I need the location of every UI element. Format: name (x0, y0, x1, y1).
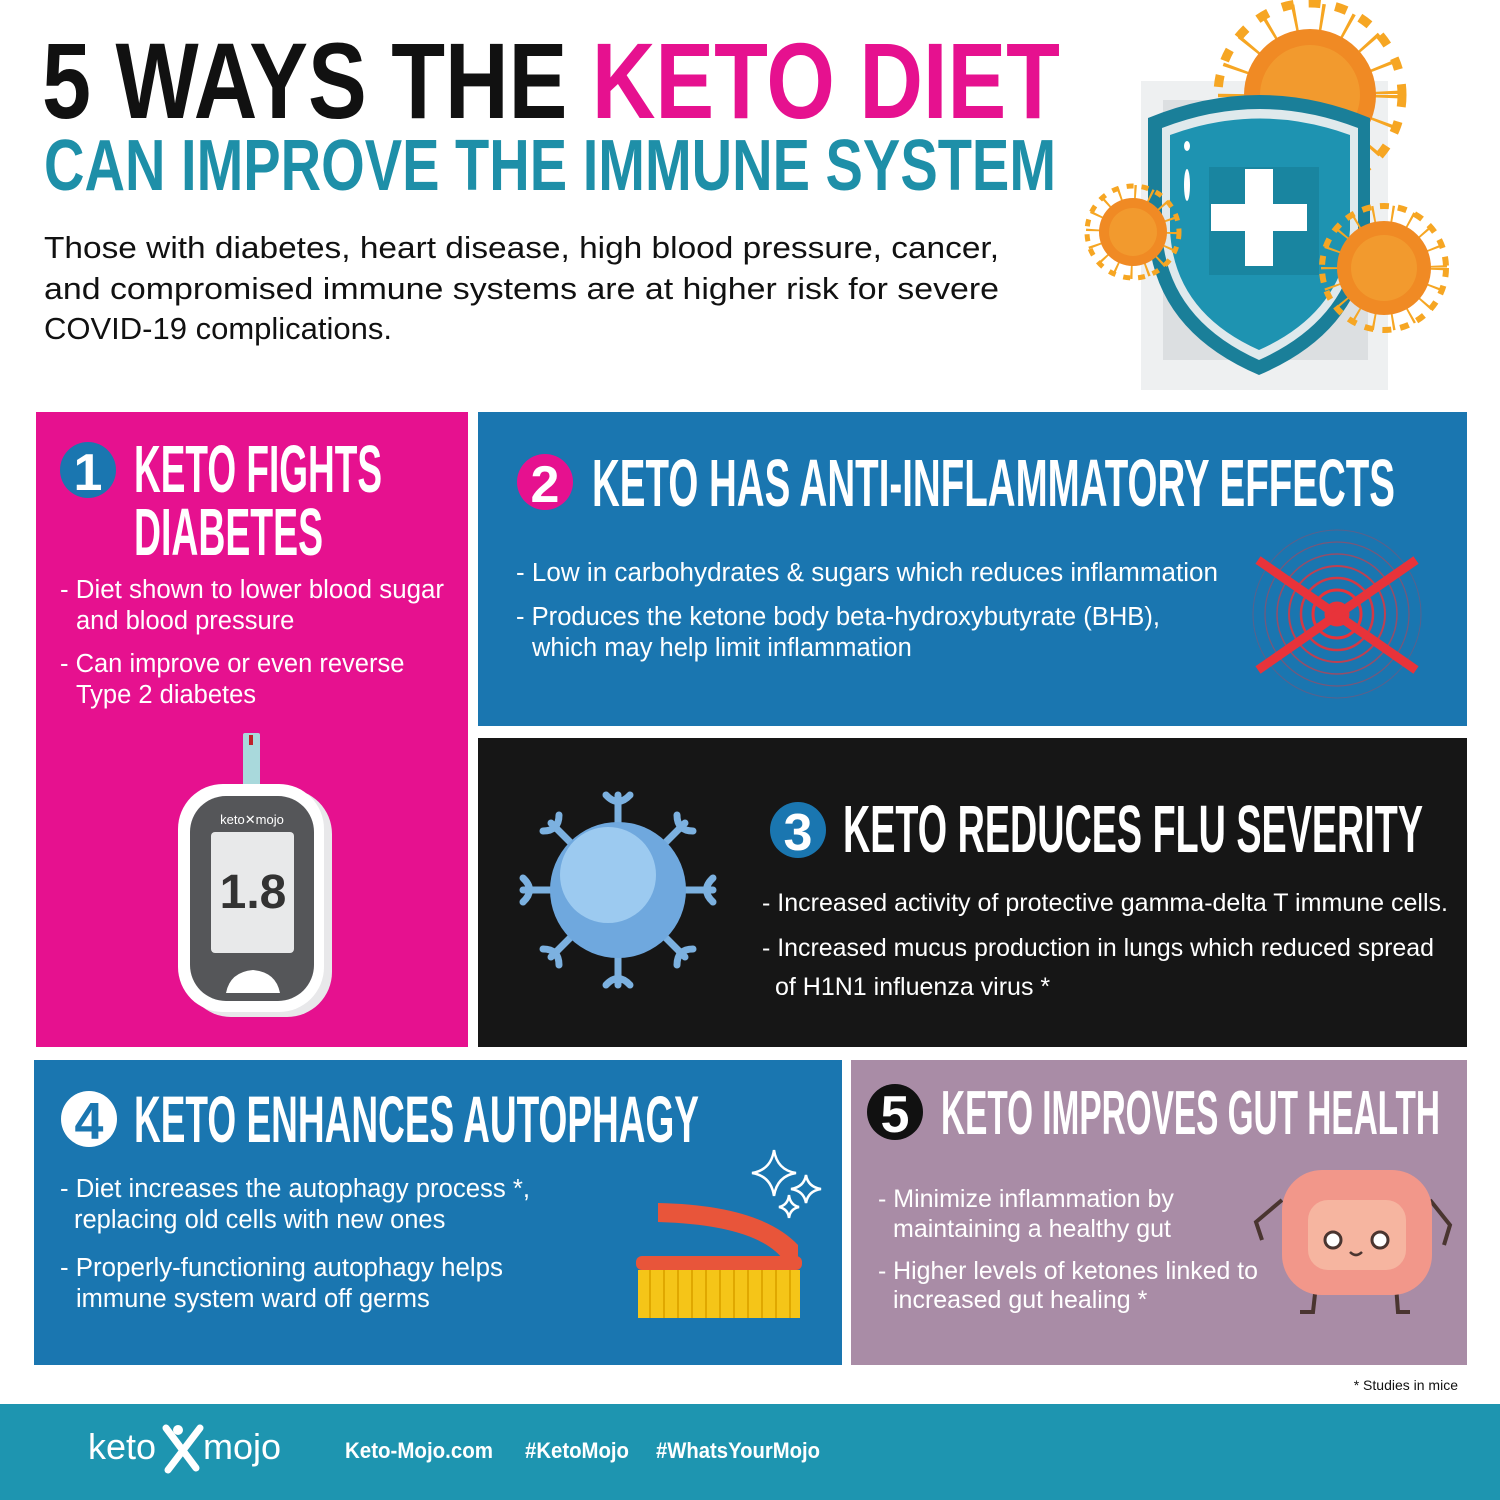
icon: keto-mojo meter: 1.8 (220, 866, 286, 919)
intro text: Those with diabetes, heart disease, high blood pressure, cancer, (44, 230, 999, 265)
icon: scrub brush (636, 1203, 802, 1318)
heading 1 (134, 432, 382, 570)
number badge 5: 5 (881, 1086, 909, 1144)
bullets 3: of H1N1 influenza virus * (775, 973, 1050, 1001)
title: CAN IMPROVE THE IMMUNE SYSTEM (44, 126, 1056, 206)
panel 4: autophagy (34, 1060, 842, 1365)
heading 4: KETO ENHANCES AUTOPHAGY (134, 1082, 699, 1156)
icon: happy intestine (1256, 1170, 1450, 1312)
footer (0, 1404, 1500, 1500)
number badge 4: 4 (75, 1093, 104, 1151)
icon: shield with viruses (1087, 3, 1446, 390)
bullets 2: - Produces the ketone body beta-hydroxybutyrate (BHB), (516, 603, 1160, 631)
title (42, 20, 1060, 206)
title: 5 WAYS THE KETO DIET (42, 20, 1060, 141)
footer links (345, 1438, 820, 1463)
bullets 1 (60, 576, 445, 709)
virus: right (1322, 206, 1446, 330)
bullets 5: maintaining a healthy gut (893, 1215, 1171, 1243)
bullets 4 (60, 1175, 530, 1313)
heading 1: KETO FIGHTS (134, 432, 382, 507)
footer links: #KetoMojo (525, 1438, 629, 1463)
icon: keto-mojo meter: keto✕mojo (220, 812, 284, 827)
footer logo: keto (88, 1426, 156, 1467)
panel 1: keto fights diabetes (36, 412, 468, 1047)
number badge 4 (61, 1091, 117, 1151)
number badge 5 (867, 1084, 923, 1144)
virus: top (1218, 3, 1402, 187)
number badge 1: 1 (74, 444, 102, 502)
bullets 5: - Minimize inflammation by (878, 1185, 1174, 1213)
icon: blue virus (523, 795, 713, 985)
number badge 3 (770, 802, 826, 862)
bullets 4: replacing old cells with new ones (74, 1206, 445, 1234)
bullets 3: - Increased activity of protective gamma-delta T immune cells. (762, 889, 1448, 917)
panel 3: flu severity (478, 738, 1467, 1047)
bullets 2 (516, 559, 1218, 662)
number badge 1 (60, 442, 116, 502)
bullets 4: - Diet increases the autophagy process *, (60, 1175, 530, 1203)
footer links: #WhatsYourMojo (656, 1438, 820, 1463)
footer logo: mojo (203, 1426, 281, 1467)
bullets 3 (762, 889, 1448, 1001)
footer logo (88, 1425, 281, 1470)
number badge 2: 2 (531, 456, 559, 514)
intro text: COVID-19 complications. (44, 311, 392, 346)
intro text (44, 230, 999, 346)
footer links: Keto-Mojo.com (345, 1438, 493, 1463)
bullets 5: increased gut healing * (893, 1286, 1148, 1314)
number badge 2 (517, 454, 573, 514)
bullets 5: - Higher levels of ketones linked to (878, 1257, 1258, 1285)
footnote: * Studies in mice (1354, 1377, 1458, 1393)
bullets 1: - Diet shown to lower blood sugar (60, 576, 445, 604)
bullets 1: Type 2 diabetes (76, 681, 256, 709)
icon: sparkles (752, 1150, 821, 1218)
virus: left (1087, 186, 1179, 278)
icon: keto-mojo meter (178, 733, 332, 1017)
bullets 1: and blood pressure (76, 607, 294, 635)
bullets 1: - Can improve or even reverse (60, 650, 404, 678)
panel 5: gut health (851, 1060, 1467, 1365)
bullets 3: - Increased mucus production in lungs which reduced spread (762, 934, 1434, 962)
bullets 5 (878, 1185, 1258, 1314)
heading 1: DIABETES (134, 495, 323, 570)
number badge 3: 3 (784, 804, 812, 862)
bullets 2: - Low in carbohydrates & sugars which reduces inflammation (516, 559, 1218, 587)
panel 2: anti-inflammatory (478, 412, 1467, 726)
intro text: and compromised immune systems are at higher risk for severe (44, 271, 999, 306)
bullets 2: which may help limit inflammation (531, 634, 912, 662)
bullets 4: immune system ward off germs (76, 1285, 430, 1313)
bullets 4: - Properly-functioning autophagy helps (60, 1254, 503, 1282)
icon: inflammation crossed out (1253, 530, 1421, 698)
